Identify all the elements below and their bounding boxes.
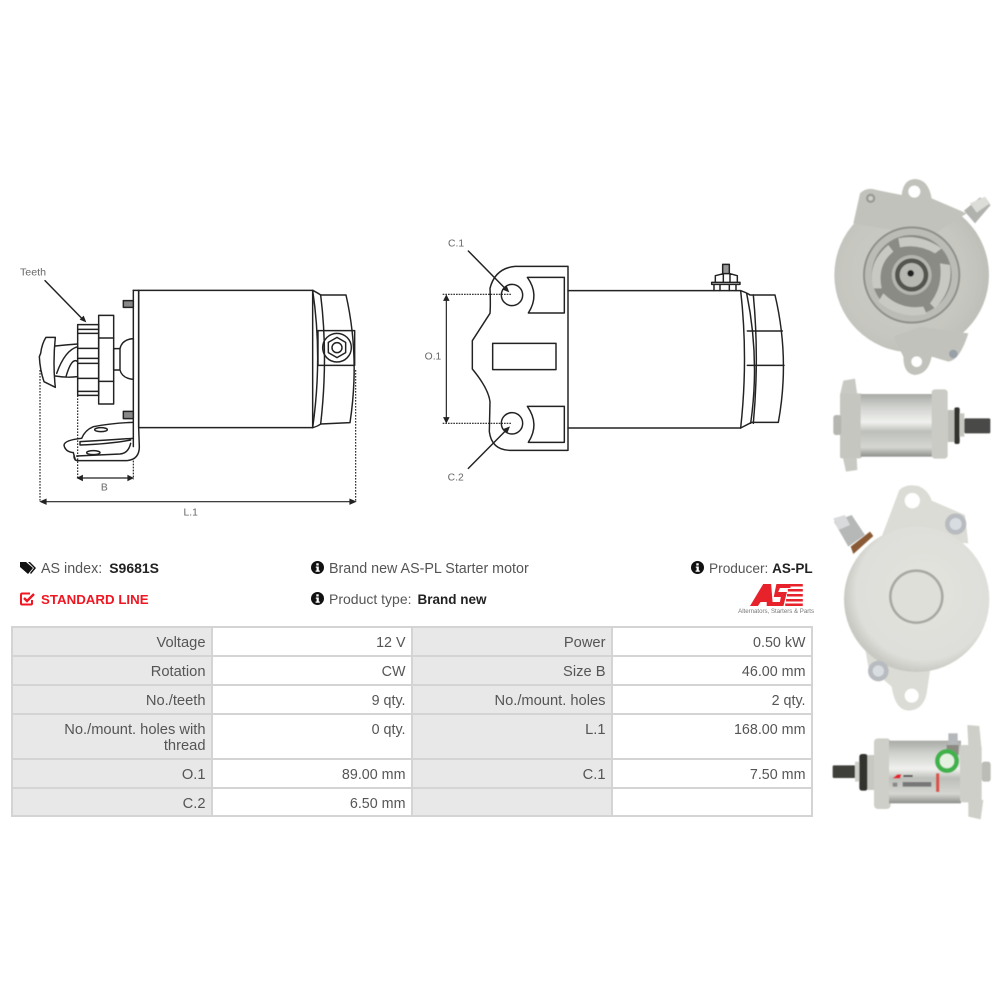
arrow: C.1 (468, 251, 509, 292)
dimension O.1 (443, 294, 511, 423)
label: B: B (101, 483, 108, 494)
specifications table: No./teeth (146, 693, 206, 709)
mounting foot (64, 422, 133, 460)
label: C.2: C.2 (448, 473, 464, 484)
icon: info (311, 561, 324, 574)
specifications table: C.2 (183, 796, 206, 812)
standard line: STANDARD LINE (41, 592, 149, 607)
terminal stud (712, 264, 740, 291)
technical drawing: front view (425, 239, 784, 484)
specifications table: CW (382, 664, 406, 680)
specifications table: 0 qty. (372, 722, 406, 738)
specifications table: 9 qty. (372, 693, 406, 709)
specifications table: 46.00 mm (742, 664, 806, 680)
mounting plate (472, 266, 568, 450)
arrow: Teeth (45, 281, 86, 322)
dimension lines (40, 370, 356, 504)
photo: starter side view right (833, 379, 990, 472)
icon: tags (20, 562, 36, 574)
specifications table: 89.00 mm (342, 767, 406, 783)
product type: Product type: Brand new (329, 591, 487, 607)
photo: starter rear end (833, 485, 989, 711)
producer: Producer: AS-PL (709, 561, 813, 576)
photo: starter front, pinion end (834, 179, 991, 375)
icon: info (691, 561, 704, 574)
specifications table (11, 626, 813, 817)
specifications table: 12 V (376, 635, 406, 651)
brand new note: Brand new AS-PL Starter motor (329, 561, 529, 577)
specifications table: 2 qty. (772, 693, 806, 709)
motor body (568, 291, 784, 428)
specifications table: 0.50 kW (753, 635, 806, 651)
icon: info (311, 592, 324, 605)
label: O.1: O.1 (425, 352, 442, 363)
specifications table: Power (564, 635, 606, 651)
specifications table: O.1 (182, 767, 206, 783)
icon: checked box (20, 592, 35, 606)
specifications table: Voltage (156, 635, 206, 651)
specifications table: 7.50 mm (750, 767, 806, 783)
specifications table: Size B (563, 664, 606, 680)
logo: AS (738, 584, 814, 615)
specifications table: thread (164, 738, 206, 754)
specifications table: 6.50 mm (350, 796, 406, 812)
specifications table: No./mount. holes (494, 693, 606, 709)
specifications table: Rotation (151, 664, 206, 680)
logo: AS: Alternators, Starters & Parts (738, 608, 814, 615)
label: L.1: L.1 (183, 507, 198, 518)
photo: starter side view left (833, 725, 991, 819)
specifications table: L.1 (585, 722, 606, 738)
AS index: AS index: S9681S (41, 560, 159, 577)
motor body (74, 290, 355, 461)
terminal nut (964, 197, 991, 223)
label: Teeth: Teeth (20, 268, 46, 279)
specifications table: 168.00 mm (734, 722, 806, 738)
terminal bolt (323, 333, 351, 362)
specifications table: No./mount. holes with (64, 722, 206, 738)
arrow: C.2 (468, 426, 510, 468)
label: C.1: C.1 (448, 239, 464, 250)
specifications table: C.1 (583, 767, 606, 783)
drive pinion (39, 301, 133, 419)
